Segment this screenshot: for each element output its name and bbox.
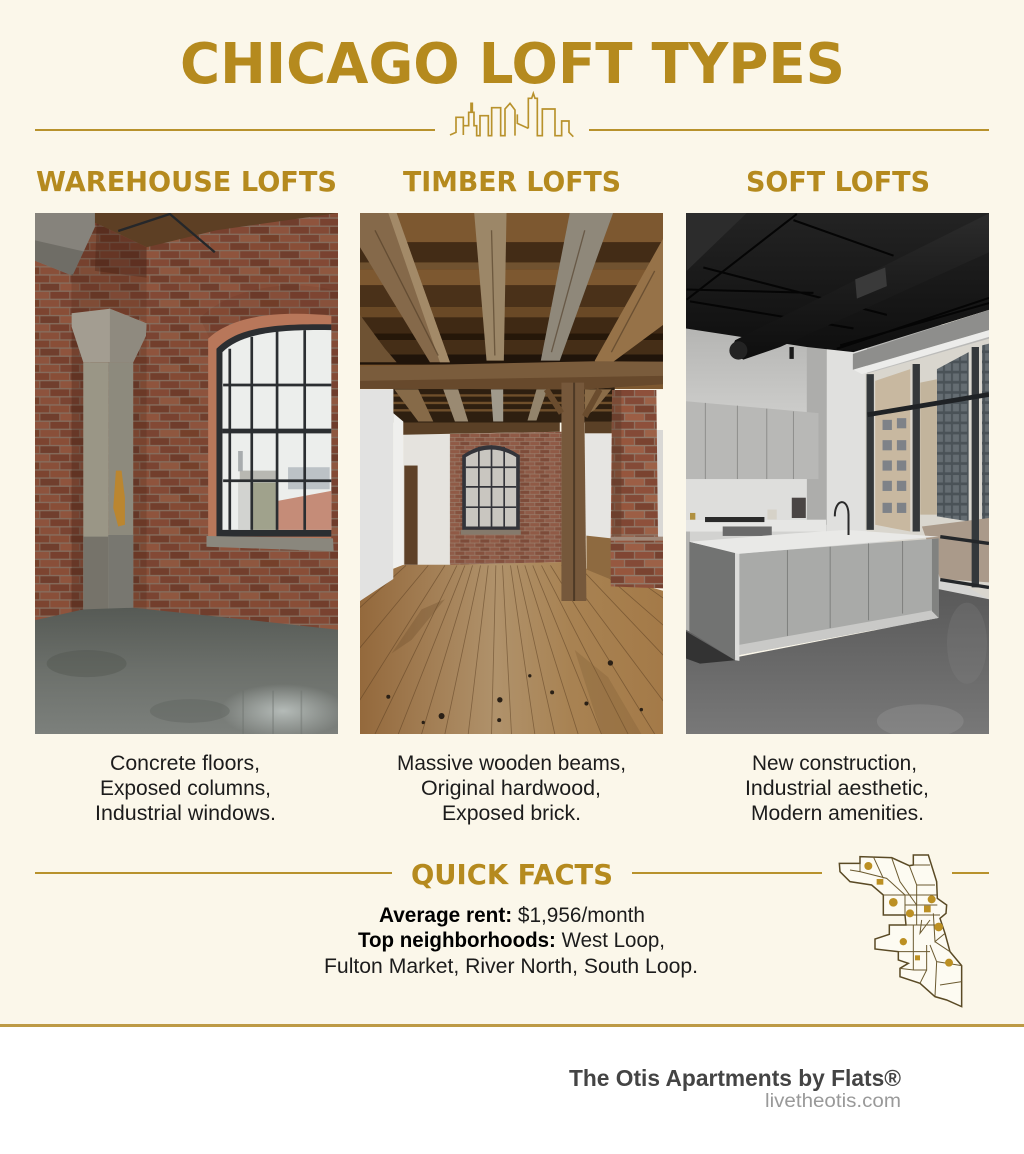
city view	[238, 451, 331, 530]
door	[404, 466, 418, 565]
floor	[360, 562, 663, 734]
icon: Chicago skyline	[450, 93, 573, 137]
post	[561, 383, 586, 601]
upper cabinets	[686, 401, 818, 479]
right white area and half wall	[585, 433, 613, 538]
quick facts text: Fulton Market, River North, South Loop.	[324, 955, 698, 978]
quick facts divider lines	[35, 872, 989, 874]
caption: warehouse lofts	[95, 752, 276, 825]
back brick wall	[450, 432, 561, 565]
footer brand name: The Otis Apartments by Flats®	[569, 1065, 901, 1091]
caption: timber lofts	[397, 752, 626, 825]
heading: timber lofts: TIMBER LOFTS	[403, 165, 621, 198]
caption: soft lofts: Industrial aesthetic,	[745, 777, 929, 800]
icon: Chicago neighborhood map	[839, 855, 962, 1007]
title divider with skyline	[35, 93, 989, 137]
heading: soft lofts: SOFT LOFTS	[746, 165, 930, 198]
left wall shade	[72, 274, 83, 613]
window reveal	[208, 314, 331, 538]
lower ceiling	[393, 386, 615, 423]
island	[686, 535, 689, 633]
concrete capital	[72, 309, 147, 362]
roof beams	[360, 213, 450, 362]
walls	[686, 325, 989, 630]
main cross beam	[360, 361, 663, 389]
caption: timber lofts: Massive wooden beams,	[397, 752, 626, 775]
duct	[730, 213, 989, 360]
concrete beam	[35, 213, 95, 276]
column upper brick	[72, 223, 147, 322]
caption: soft lofts: New construction,	[752, 752, 917, 775]
back window	[462, 445, 520, 530]
soffit	[853, 310, 989, 370]
back counter and stove	[686, 520, 826, 532]
window brick arch	[200, 285, 338, 339]
brick pier	[611, 390, 663, 588]
concrete shaft	[83, 362, 109, 609]
image: warehouse loft interior	[35, 213, 338, 734]
ceiling	[73, 213, 338, 247]
window view	[865, 339, 989, 599]
caption: warehouse lofts: Exposed columns,	[100, 777, 271, 800]
heading: warehouse lofts: WAREHOUSE LOFTS	[36, 165, 337, 198]
caption: warehouse lofts: Concrete floors,	[110, 752, 260, 775]
footer website: livetheotis.com	[765, 1091, 901, 1112]
title: CHICAGO LOFT TYPES	[180, 32, 845, 97]
image: soft loft interior	[686, 213, 989, 734]
window frame	[870, 347, 975, 587]
window sill	[206, 536, 334, 551]
quick facts text: Top neighborhoods: West Loop,	[358, 929, 665, 952]
caption: soft lofts: Modern amenities.	[751, 802, 924, 825]
quick facts text	[324, 904, 698, 978]
footer panel	[0, 1024, 1024, 1154]
heading: quick facts: QUICK FACTS	[411, 858, 613, 891]
image: timber loft interior	[360, 213, 663, 734]
ceiling	[686, 213, 989, 352]
floor	[35, 608, 338, 734]
floor	[686, 589, 989, 734]
white walls	[360, 389, 393, 601]
window	[216, 324, 331, 537]
lower beams	[394, 389, 433, 422]
header beam	[403, 423, 560, 435]
faucet	[835, 502, 849, 535]
backsplash	[686, 479, 807, 520]
caption: timber lofts: Exposed brick.	[442, 802, 581, 825]
quick facts text: Average rent: $1,956/month	[379, 904, 645, 927]
caption: timber lofts: Original hardwood,	[421, 777, 601, 800]
plank ceiling	[360, 213, 663, 389]
caption: warehouse lofts: Industrial windows.	[95, 802, 276, 825]
caption: soft lofts	[745, 752, 929, 825]
